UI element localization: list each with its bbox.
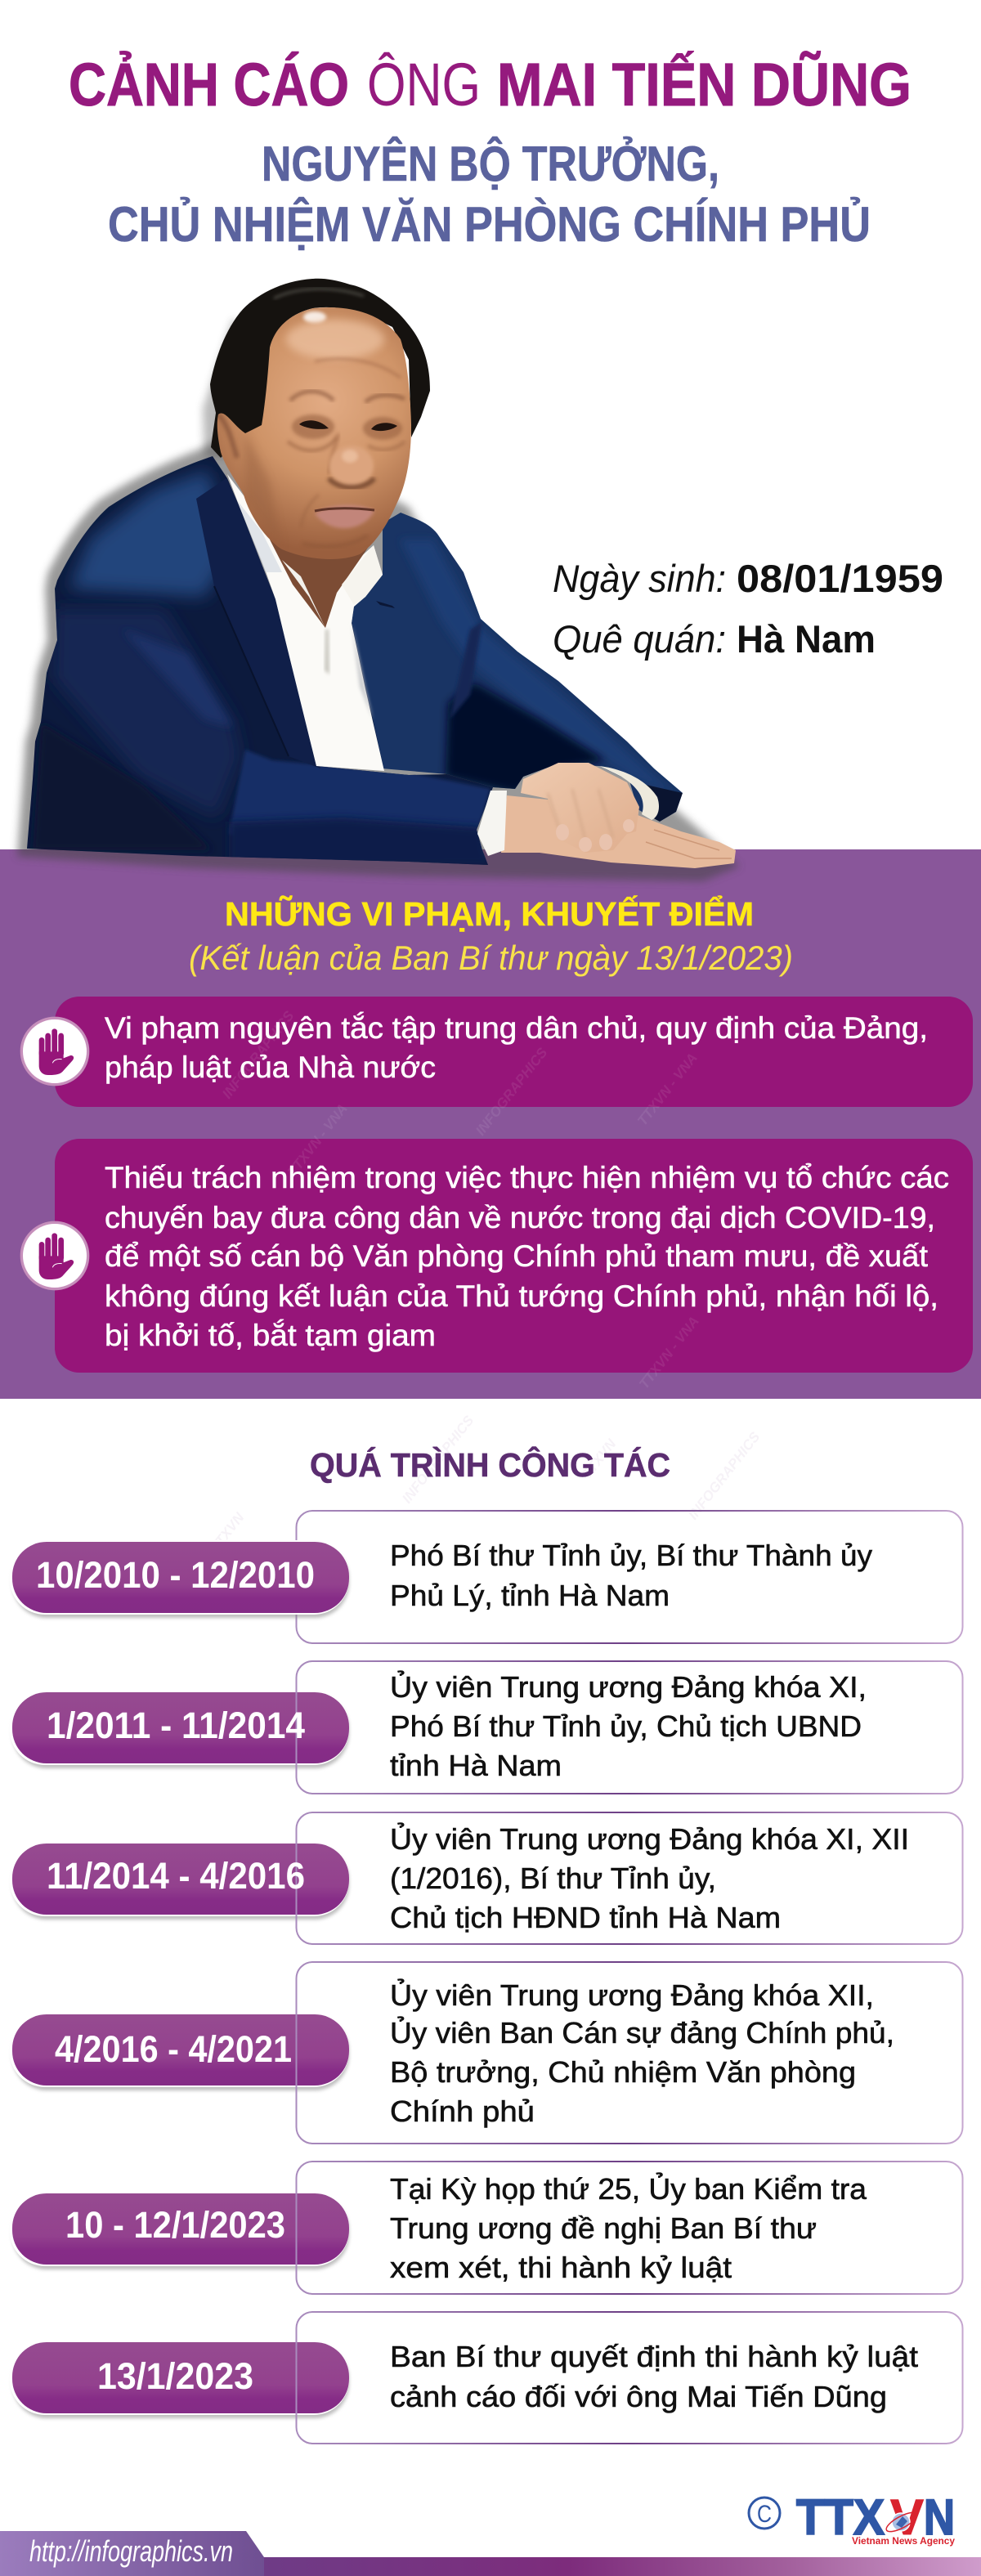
panel: violations background xyxy=(0,849,981,1399)
title line 1: CẢNH CÁO xyxy=(69,51,349,119)
timeline row 6: 13/1/2023 xyxy=(97,2355,253,2397)
text: INFOGRAPHICS xyxy=(685,1429,764,1522)
timeline row 4: 4/2016 - 4/2021 xyxy=(55,2028,292,2070)
timeline row 3 xyxy=(10,1812,963,1944)
jacket right side xyxy=(352,513,683,822)
timeline row 4: Ủy viên Trung ương Đảng khóa XII, xyxy=(390,1978,874,2012)
upper hand xyxy=(521,763,639,853)
timeline row 5: 10 - 12/1/2023 xyxy=(65,2204,285,2246)
timeline row 4: Bộ trưởng, Chủ nhiệm Văn phòng xyxy=(390,2055,856,2089)
cuff of right sleeve xyxy=(599,766,659,820)
icon: stop hand 2 xyxy=(21,1222,88,1289)
mouth xyxy=(315,505,374,528)
portrait illustration xyxy=(16,279,740,881)
timeline row 1: Phó Bí thư Tỉnh ủy, Bí thư Thành ủy xyxy=(390,1539,872,1572)
birth date xyxy=(553,557,943,600)
timeline row 1: Phủ Lý, tỉnh Hà Nam xyxy=(390,1579,670,1612)
panel: violations content: TTXVN - VNA xyxy=(634,1051,701,1128)
violation card 2 xyxy=(55,1139,973,1373)
agency wordmark: N xyxy=(924,2489,955,2545)
panel: violations content: TTXVN - VNA xyxy=(284,1101,351,1179)
icon: stop hand 1 xyxy=(21,1018,88,1085)
hometown xyxy=(553,617,876,661)
panel: violations content: TTXVN - VNA xyxy=(636,1314,702,1391)
jacket left side and arm xyxy=(27,456,493,865)
personal info xyxy=(553,557,943,661)
forehead highlight xyxy=(303,311,326,323)
subtitle: CHỦ NHIỆM VĂN PHÒNG CHÍNH PHỦ xyxy=(108,197,871,252)
timeline row 3: 11/2014 - 4/2016 xyxy=(47,1855,305,1897)
panel: violations content: INFOGRAPHICS xyxy=(473,1045,551,1138)
neck xyxy=(270,540,368,628)
subtitle: NGUYÊN BỘ TRƯỞNG, xyxy=(262,137,719,191)
title line 1 xyxy=(69,51,912,119)
agency wordmark: TTX xyxy=(796,2489,885,2545)
timeline row 5 xyxy=(10,2162,963,2294)
text: TTXVN xyxy=(207,1509,248,1555)
timeline row 6: cảnh cáo đối với ông Mai Tiến Dũng xyxy=(390,2380,887,2413)
drop shadow xyxy=(17,425,740,881)
hometown: Hà Nam xyxy=(737,617,876,661)
eyes xyxy=(292,414,334,439)
agency wordmark xyxy=(796,2489,955,2545)
globe xyxy=(884,2509,920,2535)
lower hand xyxy=(501,795,736,868)
title line 1: MAI TIẾN DŨNG xyxy=(497,51,912,119)
violation card 2: bị khởi tố, bắt tạm giam xyxy=(105,1319,436,1352)
gap behind arms xyxy=(444,760,478,783)
title line 1: ÔNG xyxy=(367,51,481,119)
timeline row 1: 10/2010 - 12/2010 xyxy=(36,1554,315,1596)
title block xyxy=(69,51,912,252)
timeline row 2: Phó Bí thư Tỉnh ủy, Chủ tịch UBND xyxy=(390,1709,862,1743)
agency tagline: Vietnam News Agency xyxy=(852,2535,955,2547)
timeline row 2 xyxy=(10,1661,963,1794)
eyebrows xyxy=(290,392,334,401)
violation card 2: chuyến bay đưa công dân về nước trong đại dịch COVID-19, xyxy=(105,1201,935,1234)
violation card 2: không đúng kết luận của Thủ tướng Chính phủ, nhận hối lộ, xyxy=(105,1279,938,1313)
nose xyxy=(329,433,338,474)
timeline row 3: Chủ tịch HĐND tỉnh Hà Nam xyxy=(390,1901,781,1934)
website url: http://infographics.vn xyxy=(29,2534,233,2568)
timeline row 5: Trung ương đề nghị Ban Bí thư xyxy=(390,2211,817,2245)
shirt xyxy=(227,474,384,771)
timeline row 6 xyxy=(10,2312,963,2444)
subtitle xyxy=(108,137,871,252)
timeline row 3: (1/2016), Bí thư Tỉnh ủy, xyxy=(390,1861,716,1895)
timeline row 1 xyxy=(10,1511,963,1643)
timeline row 4: Ủy viên Ban Cán sự đảng Chính phủ, xyxy=(390,2015,894,2050)
timeline row 6: Ban Bí thư quyết định thi hành kỷ luật xyxy=(390,2340,918,2373)
hair xyxy=(210,279,430,458)
lapel xyxy=(196,478,320,768)
violation card 2: Thiếu trách nhiệm trong việc thực hiện nhiệm vụ tổ chức các xyxy=(105,1161,949,1194)
hometown: Quê quán: xyxy=(553,617,726,661)
birth date: 08/01/1959 xyxy=(737,557,943,600)
timeline row 2: tỉnh Hà Nam xyxy=(390,1749,562,1782)
panel: violations content xyxy=(21,894,973,1391)
timeline row 3: Ủy viên Trung ương Đảng khóa XI, XII xyxy=(390,1821,909,1856)
birth date: Ngày sinh: xyxy=(553,557,726,600)
agency wordmark: V xyxy=(890,2489,924,2545)
sleeve cuff xyxy=(477,791,507,856)
right collar xyxy=(342,545,383,605)
violation card 2: để một số cán bộ Văn phòng Chính phủ tham mưu, đề xuất xyxy=(105,1239,929,1273)
timeline row 4: Chính phủ xyxy=(390,2094,535,2128)
timeline row 5: xem xét, thi hành kỷ luật xyxy=(390,2251,732,2284)
text: TTXVN xyxy=(579,1436,620,1481)
section heading: career: QUÁ TRÌNH CÔNG TÁC xyxy=(310,1446,670,1484)
text: INFOGRAPHICS xyxy=(399,1413,477,1506)
panel: violations content: INFOGRAPHICS xyxy=(219,1008,298,1101)
panel heading: NHỮNG VI PHẠM, KHUYẾT ĐIỂM xyxy=(225,894,754,933)
timeline row 2: Ủy viên Trung ương Đảng khóa XI, xyxy=(390,1669,867,1704)
panel subheading: (Kết luận của Ban Bí thư ngày 13/1/2023) xyxy=(189,939,793,977)
logo: TTXVN xyxy=(749,2489,955,2547)
copyright mark xyxy=(749,2498,780,2529)
violation card 1: pháp luật của Nhà nước xyxy=(105,1051,436,1084)
violation card 1 xyxy=(55,997,973,1107)
copyright mark: C xyxy=(757,2501,772,2528)
footer tab xyxy=(0,2531,264,2576)
ear shade and cheek shade xyxy=(218,414,237,458)
violation card 1: Vi phạm nguyên tắc tập trung dân chủ, quy định của Đảng, xyxy=(105,1011,928,1045)
timeline row 4 xyxy=(10,1962,963,2144)
face xyxy=(217,307,411,559)
timeline row 5: Tại Kỳ họp thứ 25, Ủy ban Kiểm tra xyxy=(390,2171,867,2206)
footer band xyxy=(0,2531,981,2576)
timeline row 2: 1/2011 - 11/2014 xyxy=(47,1705,305,1746)
